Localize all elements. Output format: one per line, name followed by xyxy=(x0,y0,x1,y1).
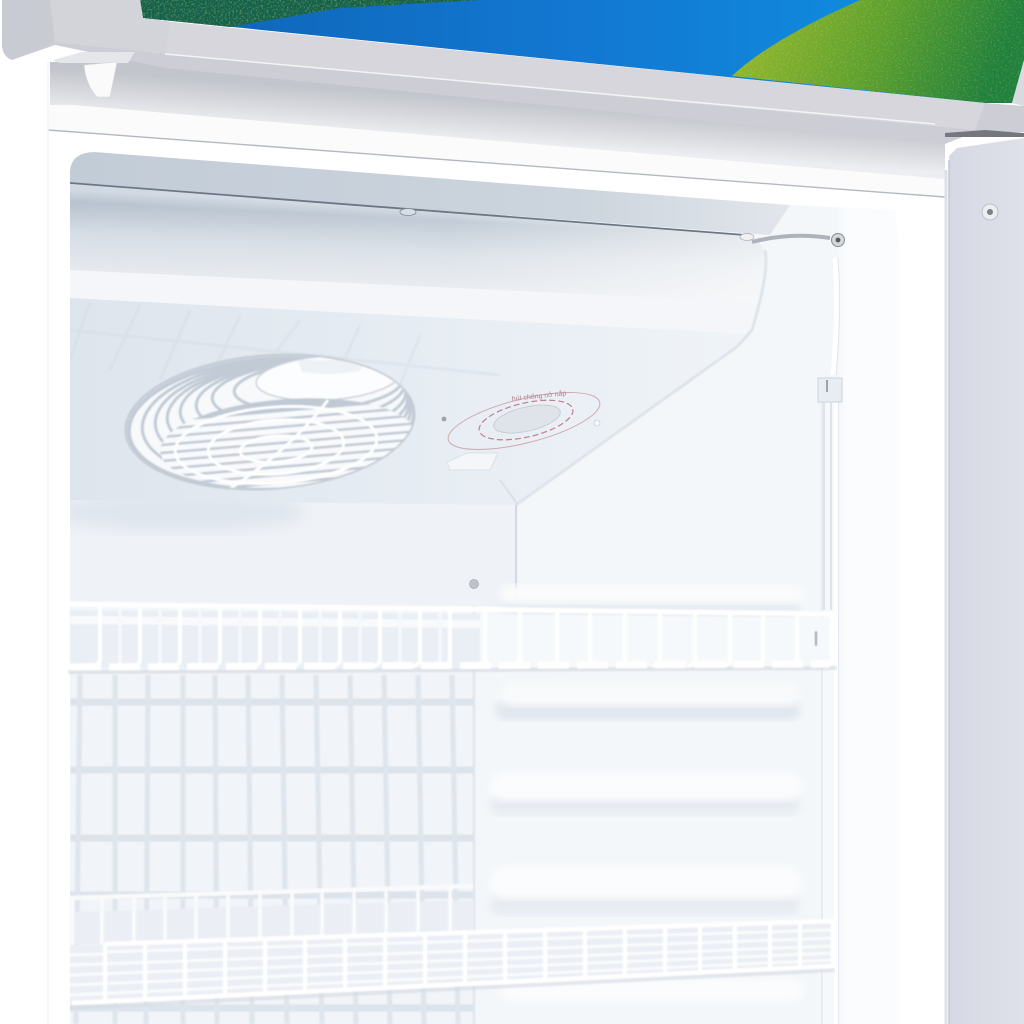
evaporator hood panel xyxy=(70,183,766,600)
left frame edge line xyxy=(47,62,49,1024)
panel beneath hood xyxy=(473,600,475,606)
bright face of white frame band xyxy=(48,105,945,197)
top wire shelf xyxy=(70,604,835,672)
fan slot area xyxy=(160,398,412,488)
right rail column xyxy=(822,400,840,1024)
soft frame fade on the right xyxy=(842,190,922,1024)
temperature dial with label xyxy=(442,381,605,470)
hinge clip xyxy=(53,52,135,97)
temperature dial with label: hút chống nở nắp xyxy=(511,388,567,403)
top header frame xyxy=(2,0,1024,144)
fan grille xyxy=(124,354,416,491)
right grey side panel xyxy=(949,138,1024,1024)
left rear wall with wire grid xyxy=(70,600,475,1024)
interior cavity xyxy=(70,152,841,1024)
frame joint line xyxy=(48,130,945,197)
top grey strip xyxy=(70,152,790,235)
side ribs of right wall xyxy=(493,583,800,913)
advertising picture panel xyxy=(140,0,1024,106)
LED light cable and bracket xyxy=(740,234,844,610)
shadow under fan xyxy=(70,500,298,532)
lower back wire shelf xyxy=(70,886,473,945)
shaded underside of header xyxy=(50,60,945,197)
right frame inner edge xyxy=(944,170,948,1024)
vertical rails on right wall xyxy=(822,402,823,1024)
mounting screw xyxy=(470,580,478,588)
lower front wire shelf xyxy=(70,921,835,1008)
